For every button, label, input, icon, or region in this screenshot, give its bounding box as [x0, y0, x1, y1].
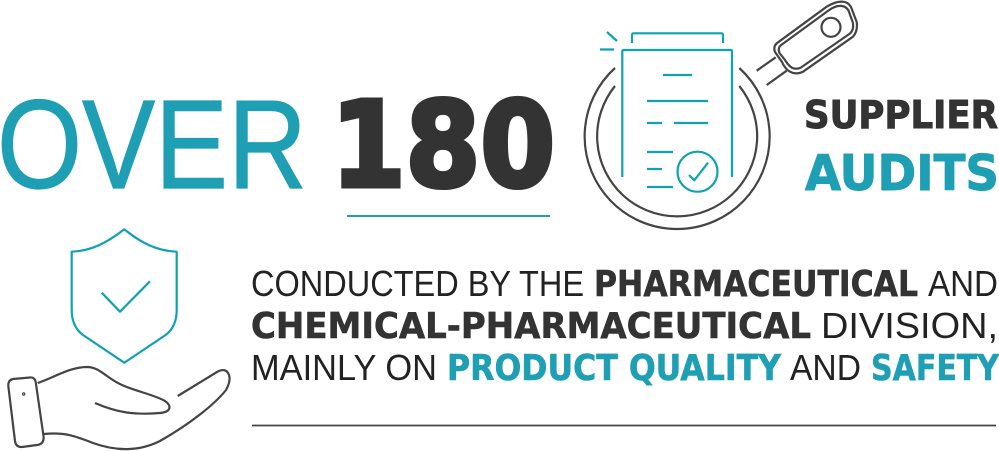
line 3: AND	[790, 347, 861, 388]
underline below number	[347, 215, 550, 217]
line 2: DIVISION,	[821, 305, 998, 346]
headline: OVER: OVER	[0, 74, 307, 215]
text block: conducted by the pharmaceutical division	[251, 263, 999, 389]
bottom rule	[252, 424, 996, 426]
icon: document under magnifying pan	[585, 2, 857, 229]
line 3	[251, 347, 999, 389]
line 1: PHARMACEUTICAL	[594, 264, 918, 305]
line 1	[251, 263, 998, 305]
line 3: PRODUCT QUALITY	[447, 348, 782, 389]
line 2: CHEMICAL-PHARMACEUTICAL	[251, 306, 811, 347]
shield with check	[72, 229, 177, 363]
headline number: 180: 180	[331, 76, 555, 214]
line 1: CONDUCTED BY THE	[251, 263, 584, 304]
icon: shield held above hand	[8, 229, 230, 449]
clipboard document	[600, 32, 732, 192]
open hand with cuff	[8, 367, 230, 449]
pan outer and inner rim	[585, 2, 857, 229]
line 3: MAINLY ON	[251, 347, 437, 388]
